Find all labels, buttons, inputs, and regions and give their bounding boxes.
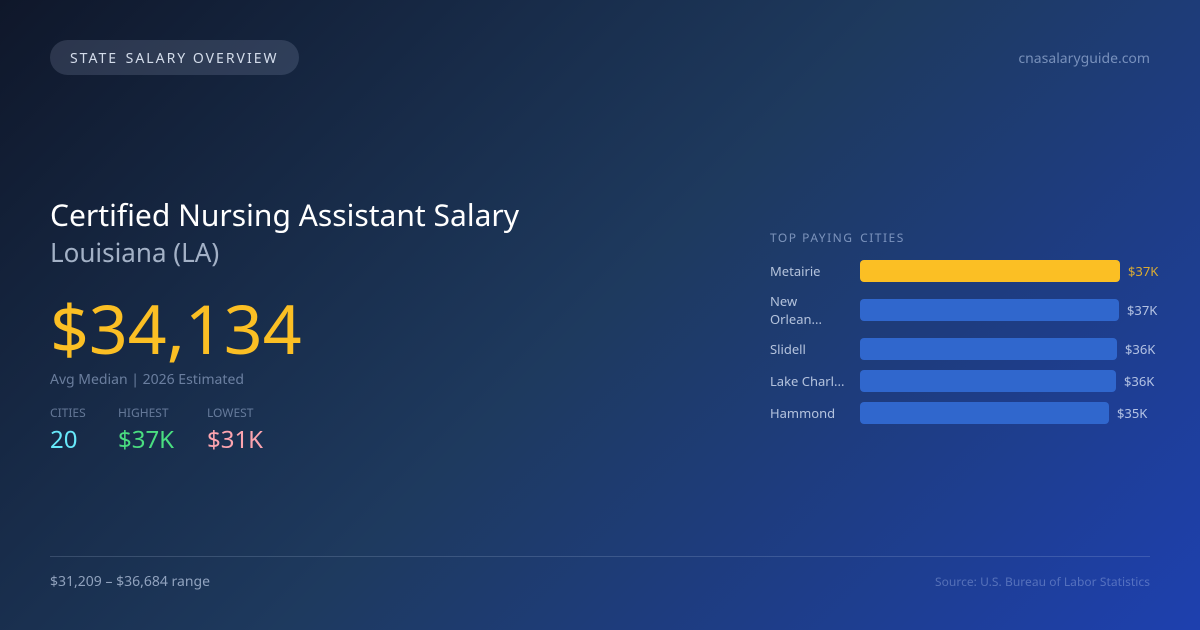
row: Metairie — [770, 260, 1158, 282]
row: New Orleans: Orlean... — [770, 310, 822, 328]
stat: highest: HIGHEST — [118, 404, 169, 421]
row: Lake Charles: Lake Charl... — [770, 372, 844, 390]
chart heading: TOP PAYING CITIES — [770, 229, 905, 246]
row: Metairie: $37K — [1128, 262, 1158, 280]
stat: lowest: LOWEST — [207, 404, 253, 421]
stat: highest — [118, 404, 174, 456]
badge: state salary overview — [50, 40, 299, 75]
stat: lowest: $31K — [207, 423, 263, 456]
stat: cities: CITIES — [50, 404, 86, 421]
site name: cnasalaryguide.com — [1018, 49, 1150, 68]
row: New Orleans — [770, 292, 1158, 328]
badge: state salary overview: STATE SALARY OVERVIEW — [70, 49, 278, 68]
stat: highest: $37K — [118, 423, 174, 456]
footer: source: Source: U.S. Bureau of Labor Statistics — [935, 573, 1150, 590]
row: Slidell — [770, 338, 1156, 360]
row: Lake Charles — [770, 370, 1154, 392]
footer: salary range: $31,209 – $36,684 range — [50, 572, 210, 591]
row: Hammond: $35K — [1117, 404, 1147, 422]
row: Hammond — [770, 402, 1148, 424]
stat: cities — [50, 404, 86, 456]
row: Slidell: $36K — [1125, 340, 1155, 358]
subtitle: state: Louisiana (LA) — [50, 234, 219, 270]
row: Hammond: Hammond — [770, 404, 835, 422]
title: Certified Nursing Assistant Salary — [50, 194, 519, 235]
row: New Orleans: New — [770, 292, 797, 310]
row: New Orleans: $37K — [1127, 301, 1157, 319]
stat: cities: 20 — [50, 423, 77, 456]
row: Slidell: Slidell — [770, 340, 806, 358]
stat: lowest — [207, 404, 263, 456]
row: Metairie: Metairie — [770, 262, 821, 280]
row: Lake Charles: $36K — [1124, 372, 1154, 390]
main salary figure: $34,134 — [50, 281, 302, 374]
salary caption: Avg Median | 2026 Estimated — [50, 370, 244, 389]
